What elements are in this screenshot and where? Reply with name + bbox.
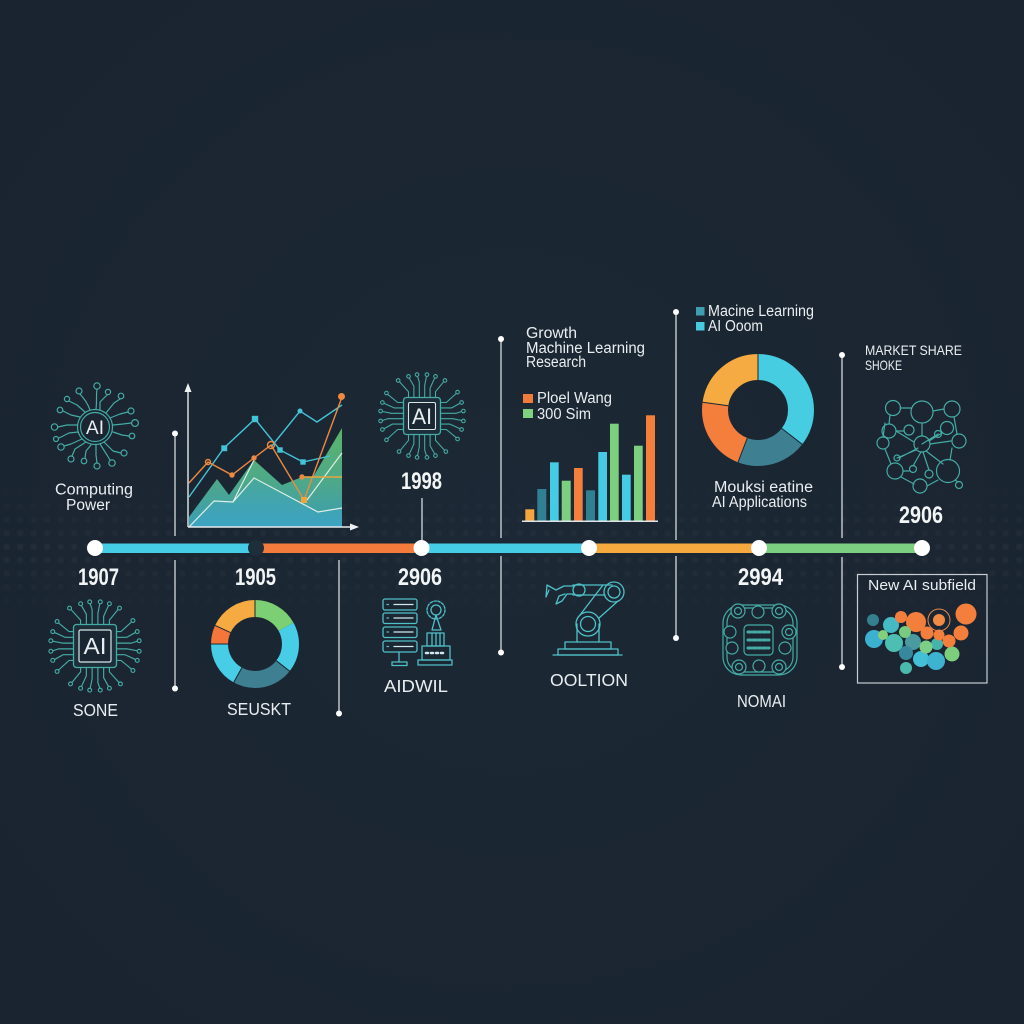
donut caption: Mouksi eatine — [714, 479, 813, 496]
donut caption — [712, 479, 813, 511]
donut chart: market share — [703, 354, 802, 462]
bar chart — [522, 415, 658, 522]
panel title: New AI subfield — [868, 577, 976, 594]
chip label: AI — [412, 404, 432, 429]
year 2994: 2994 — [738, 564, 784, 591]
icon: robot arm — [546, 582, 624, 655]
white series lines — [189, 453, 342, 527]
panel: new AI subfield — [858, 574, 987, 683]
donut legend — [696, 303, 814, 335]
infographic canvas — [48, 304, 988, 716]
icon: AI circuit brain with computing power label — [51, 383, 138, 514]
market share heading: SHOKE — [865, 357, 902, 373]
icon: servers and pedestal — [383, 599, 452, 666]
donut legend: Macine Learning — [708, 303, 814, 320]
year 2906 right: 2906 — [899, 502, 943, 529]
timeline nodes — [87, 540, 103, 556]
text: growth heading: Research — [526, 354, 586, 371]
year 1907: 1907 — [78, 564, 119, 591]
icon: radial AI circuit — [51, 383, 138, 469]
chart axes with arrows — [184, 383, 359, 530]
bar chart legend: 300 Sim — [537, 406, 591, 423]
timeline segments — [95, 544, 256, 553]
server stack — [383, 599, 417, 666]
chip label: AI — [84, 633, 106, 659]
pedestal with gear — [418, 601, 452, 665]
bubble cluster — [865, 604, 976, 674]
icon: network graph — [877, 400, 966, 493]
lower teal area — [189, 478, 342, 527]
area and line chart — [184, 383, 359, 530]
icon: neural chip ring — [723, 604, 797, 675]
label NOMAI: NOMAI — [737, 691, 786, 711]
text: growth heading: Machine Learning — [526, 340, 645, 357]
label SEUSKT: SEUSKT — [227, 699, 291, 719]
computing power text second line: Power — [66, 497, 110, 514]
market share heading — [865, 342, 962, 373]
blue series — [189, 405, 342, 497]
chip circuit — [49, 600, 141, 692]
icon: AI chip lower left — [49, 600, 141, 692]
dotted texture band — [0, 475, 1024, 625]
computing power text: Computing — [55, 482, 133, 498]
AI label: AI — [86, 418, 104, 439]
chip circuit — [379, 373, 465, 459]
donut legend: AI Ooom — [708, 318, 763, 335]
year 2906: 2906 — [398, 564, 442, 591]
icon: AI chip 1998 — [379, 373, 465, 459]
timeline bar — [87, 540, 930, 556]
year 1905: 1905 — [235, 564, 276, 591]
bar chart legend — [523, 390, 612, 423]
small donut chart — [211, 600, 290, 682]
label AIDWIL: AIDWIL — [384, 676, 448, 696]
market share heading: MARKET SHARE — [865, 342, 962, 358]
donut caption: AI Applications — [712, 494, 807, 511]
label SONE: SONE — [73, 700, 118, 720]
vertical connector lines with end dots — [172, 309, 845, 716]
green area — [189, 428, 342, 527]
label OOLTION: OOLTION — [550, 670, 628, 690]
text: growth heading — [526, 325, 645, 371]
text: growth heading: Growth — [526, 325, 577, 342]
orange series — [189, 393, 345, 503]
panel frame — [858, 574, 987, 683]
bar chart legend: Ploel Wang — [537, 390, 612, 407]
year 1998: 1998 — [401, 468, 442, 495]
